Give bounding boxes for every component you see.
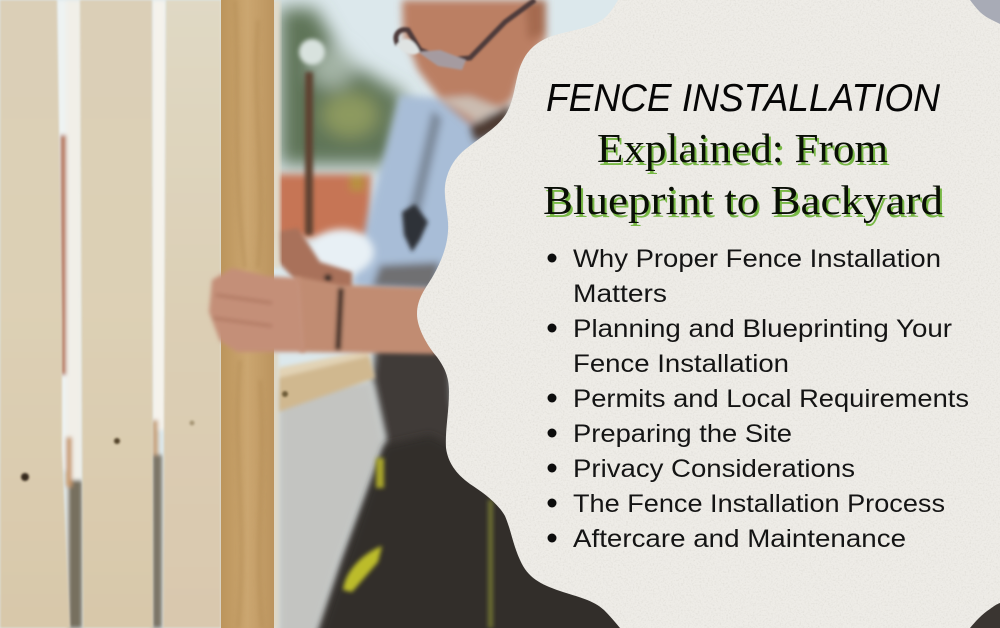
subtitle: explained from blueprint to backyard: Explained: From (599, 128, 890, 174)
apron (312, 345, 640, 628)
list item: planning and blueprinting (548, 315, 952, 378)
glasses (396, 0, 535, 70)
subtitle: explained from blueprint to backyard: Blueprint to Backyard (545, 180, 945, 226)
fence plank 3 (163, 0, 221, 628)
wavy paper panel (417, 0, 1000, 628)
list item: aftercare and maintenance: Aftercare and Maintenance (573, 525, 906, 553)
fence plank 2 (80, 0, 153, 628)
list item: planning and blueprinting: Planning and Blueprinting Your (573, 315, 952, 343)
list item: permits: Permits and Local Requirements (573, 385, 969, 413)
title: fence installation: FENCE INSTALLATION (546, 77, 941, 120)
hand over post (209, 268, 305, 352)
photo background: brick wall (276, 174, 371, 238)
bottom right corner shape (960, 598, 1000, 628)
grey ground (278, 380, 385, 628)
top right corner shape (960, 0, 1000, 30)
yellow apron marks (343, 458, 493, 628)
subtitle: explained from blueprint to backyard: Blueprint to Backyard (543, 177, 943, 223)
subtitle: explained from blueprint to backyard: Explained: From (597, 125, 888, 171)
wood post edge (272, 0, 280, 628)
list item: why proper fence installation matters: Matters (573, 280, 667, 308)
rear hand and wrist (275, 228, 352, 290)
bullet list of topics (548, 245, 969, 553)
list item: preparing the site: Preparing the Site (573, 420, 792, 448)
list item: why proper fence installation matters: Why Proper Fence Installation (573, 245, 941, 273)
man's head (402, 0, 546, 142)
plank gaps: sky and posts (56, 0, 166, 628)
photo background: lamp post (299, 39, 325, 235)
man's shirt (352, 95, 520, 300)
list item: why proper fence installation matters (548, 245, 941, 308)
list item: planning and blueprinting: Fence Installation (573, 350, 789, 378)
fence plank 1 (0, 0, 70, 628)
apron clip (402, 204, 428, 252)
list item: privacy considerations: Privacy Considerations (573, 455, 855, 483)
screw holes (21, 391, 288, 481)
horizontal wood rail (278, 350, 375, 412)
photo background: trees (280, 8, 405, 165)
dark lower apron (318, 435, 640, 628)
white object behind hand (310, 229, 374, 275)
subtitle: explained from blueprint to backyard (543, 125, 945, 226)
wood post (221, 0, 274, 628)
man's arm (295, 276, 436, 354)
list item: the fence installation process: The Fence Installation Process (573, 490, 945, 518)
